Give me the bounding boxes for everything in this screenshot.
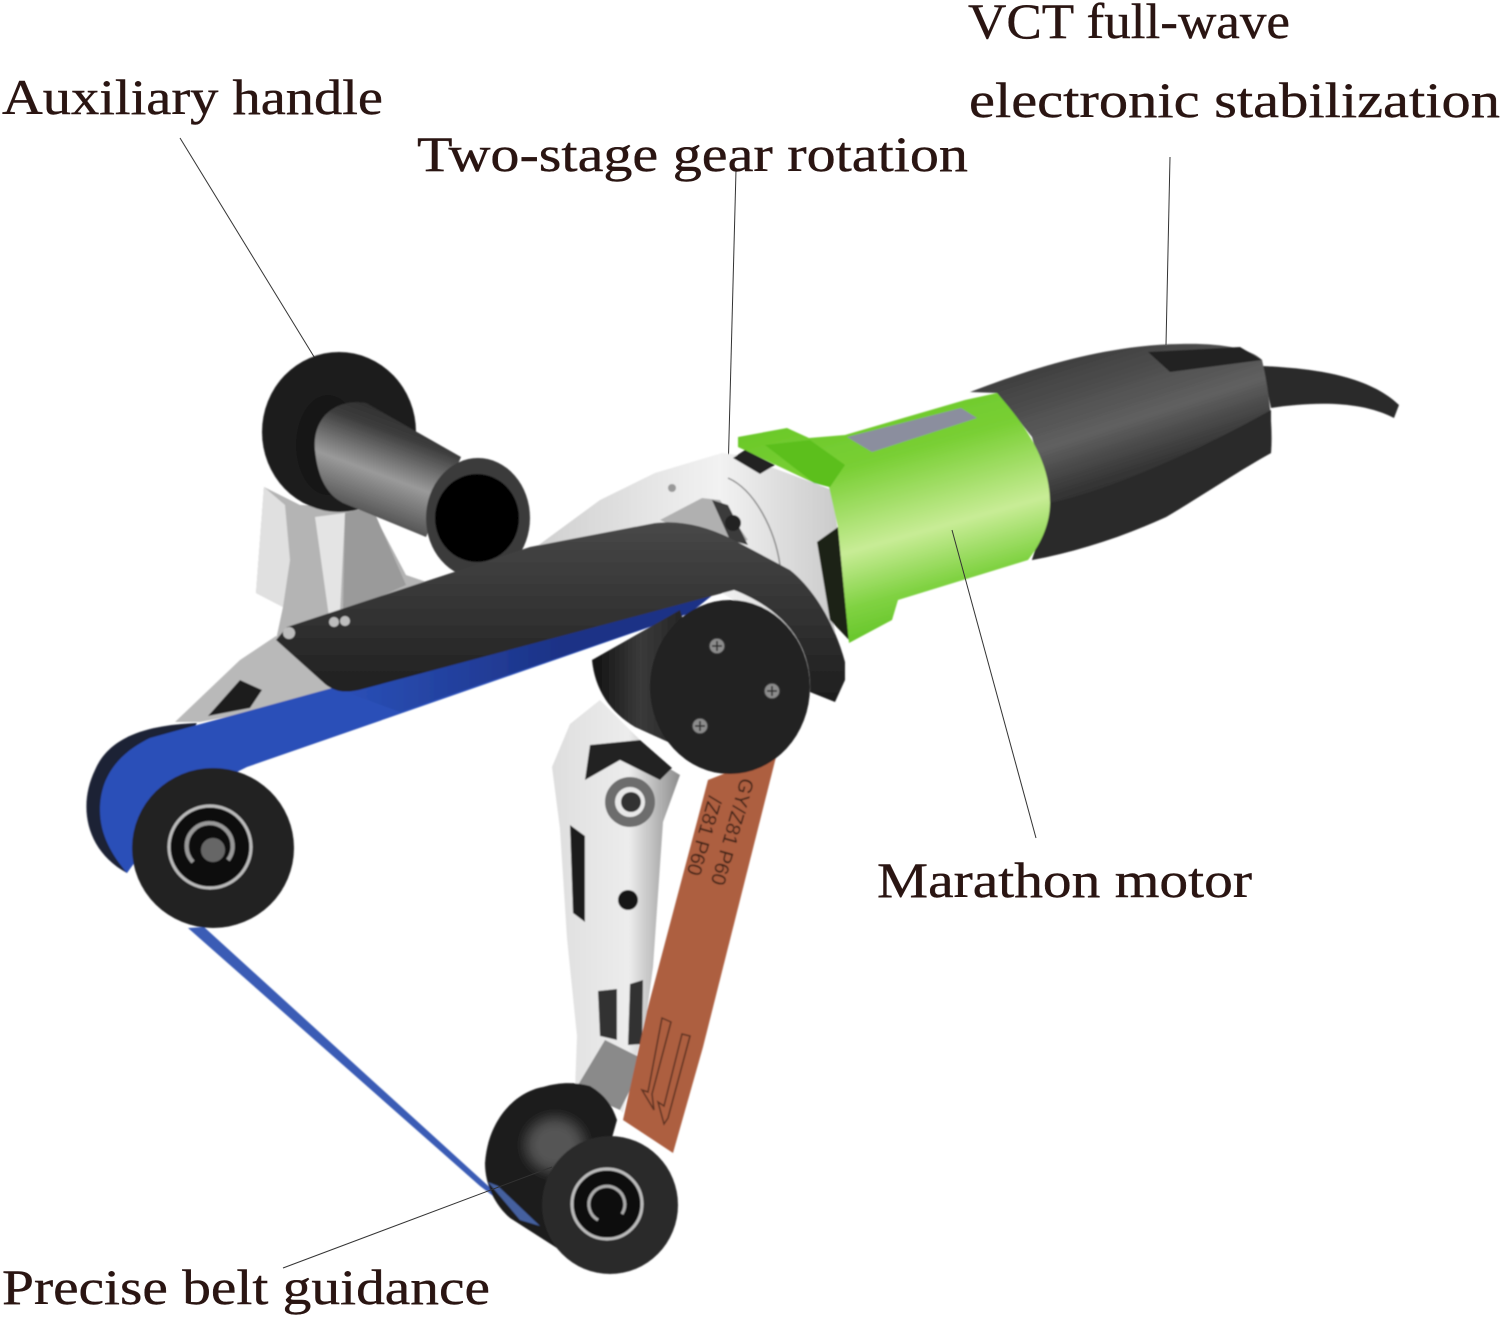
guard rivets: [283, 616, 350, 639]
label: two-stage gear rotation: Two-stage gear rotation: [417, 126, 968, 182]
leader line: gear rotation: [728, 170, 736, 475]
leader line: electronic stabilization: [1166, 157, 1170, 345]
arm slots: [598, 980, 643, 1045]
grip end hole: [435, 474, 519, 562]
arm hole: [618, 890, 638, 910]
grip collar: [296, 395, 360, 495]
arm dark inset: [570, 825, 585, 922]
silver arm: [552, 700, 680, 1113]
dark slot under clip: [733, 450, 775, 474]
motor label plate: [847, 408, 977, 452]
leader line: auxiliary handle: [180, 138, 316, 360]
mount pale left fringe: [256, 487, 290, 607]
belt printing second row: /Z81 P60: [682, 794, 725, 878]
bracket dark cutout: [208, 680, 262, 716]
grip end ring: [426, 458, 530, 578]
green clip fold shade: [765, 440, 845, 487]
lower roller disc: [542, 1136, 678, 1274]
green motor body: [738, 393, 1050, 643]
switch ridges: [1148, 347, 1262, 372]
chrome neck: [575, 1040, 645, 1110]
label: marathon motor: Marathon motor: [877, 852, 1252, 908]
label: auxiliary handle: Auxiliary handle: [2, 69, 383, 125]
handle flange: [262, 352, 416, 512]
arm top shadow: [585, 740, 672, 780]
wide blue belt: [100, 578, 734, 873]
lower roller blue belt end: [488, 1182, 540, 1226]
roller screws: [692, 638, 780, 734]
lower bracket: [175, 636, 345, 722]
lower roller highlight: [525, 1117, 585, 1173]
belt printing: GY/Z81 P60: [706, 776, 757, 887]
gear head seam: [728, 478, 780, 565]
handle mount casting: [256, 487, 450, 640]
label: precise belt guidance: Precise belt guidance: [2, 1259, 490, 1315]
mount shade: [343, 507, 406, 613]
left pulley: [132, 768, 294, 928]
housing lower shade: [1032, 410, 1271, 560]
lower roller body: [485, 1083, 617, 1250]
label: VCT line 2: electronic stabilization: [969, 72, 1500, 128]
mount center column: [315, 513, 345, 617]
leader line: precise belt guidance: [283, 1167, 552, 1268]
blue belt dark section: [340, 578, 734, 712]
belt guard: [276, 522, 845, 702]
upper pulley dark backing: [86, 723, 197, 873]
power cable: [1262, 366, 1399, 418]
arm bolt: [605, 777, 655, 827]
belt arrows: [642, 1018, 690, 1124]
leader line: marathon motor: [952, 530, 1036, 838]
motor rear housing black: [970, 344, 1272, 560]
silver gear head: [536, 453, 842, 650]
belt sander tool: [86, 344, 1399, 1274]
upper contact roller disc: [650, 600, 810, 774]
upper contact roller body: [592, 610, 730, 770]
brown sanding belt: [623, 753, 777, 1153]
thin blue return belt: [188, 927, 530, 1224]
gear head recess and bolt: [660, 484, 748, 545]
grip tube: [315, 402, 461, 537]
motor vent gap: [817, 527, 849, 640]
